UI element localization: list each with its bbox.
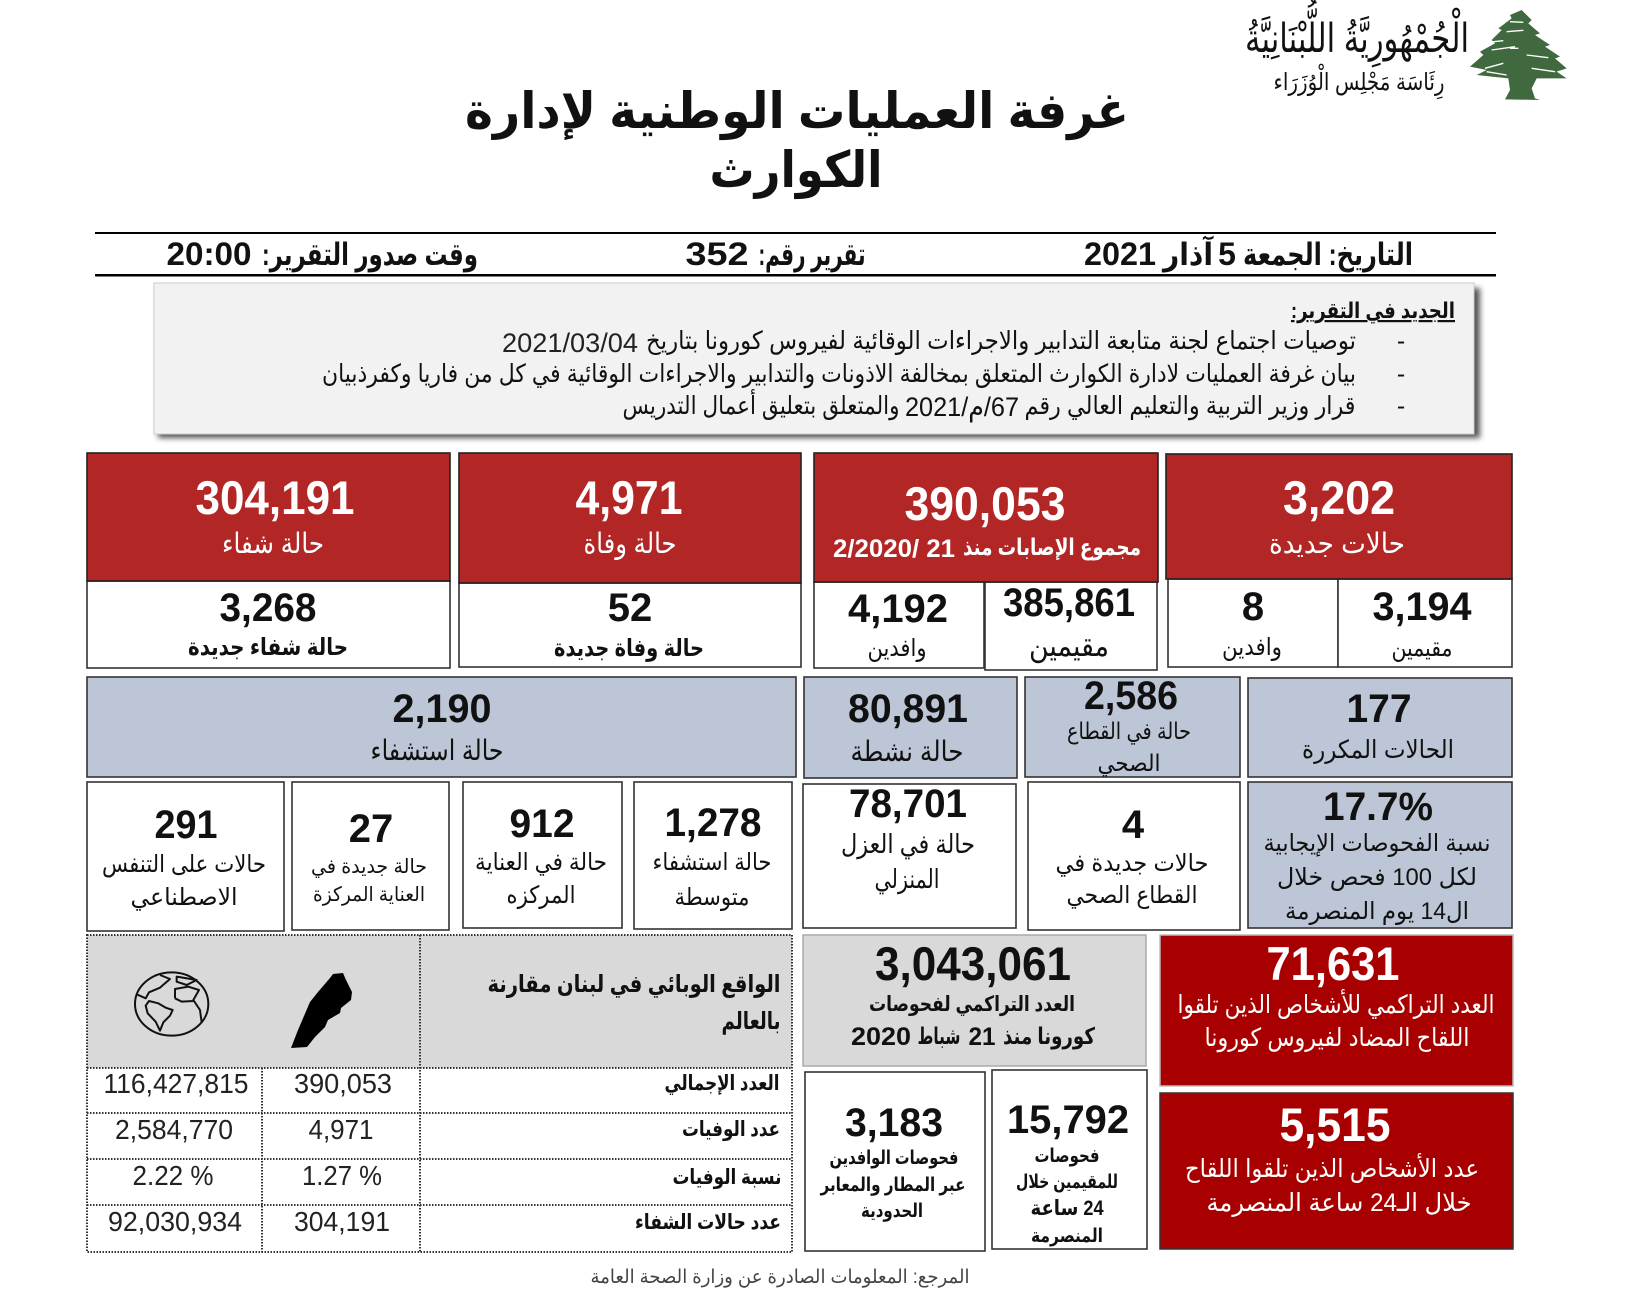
card: new health sector cases: القطاع الصحي [1066, 882, 1198, 909]
news items [322, 327, 1405, 422]
report date [1084, 235, 1413, 273]
panel: what's new in the report [154, 283, 1480, 438]
card: health sector cases: الصحي [1098, 750, 1160, 777]
report time: وقت صدور التقرير: [262, 237, 478, 273]
card: resident tests: للمقيمين خلال [1016, 1172, 1118, 1193]
card: total cases: 390,053 [904, 477, 1066, 530]
news items: بيان غرفة العمليات لادارة الكوارث المتعلق بمخالفة الاذونات والتدابير والاجراءات الوقائية في كل من فاريا وكفرذبيان [322, 360, 1356, 389]
card: total cases [814, 453, 1158, 670]
card: deaths: حالة وفاة [584, 528, 676, 560]
card: positivity rate: لكل 100 فحص خلال [1277, 864, 1477, 891]
row: death rate [132, 1160, 782, 1191]
card: home isolation: المنزلي [874, 864, 940, 895]
report info bar [95, 232, 1496, 276]
card: total cases: مقيمين [1029, 630, 1109, 663]
row: recoveries: 304,191 [294, 1206, 390, 1237]
card: vaccinated in 24 hours [1160, 1093, 1513, 1249]
card: resident tests: المنصرمة [1031, 1226, 1103, 1247]
card: new health sector cases: 4 [1122, 803, 1145, 847]
table heading: الواقع الوبائي في لبنان مقارنة [488, 971, 780, 998]
table heading: بالعالم [722, 1008, 780, 1035]
card: active cases [804, 677, 1017, 778]
card: deaths: 4,971 [576, 471, 682, 524]
card: resident tests: 15,792 [1007, 1098, 1129, 1142]
testing start date: 2020 [851, 1023, 911, 1051]
card: repeated cases: الحالات المكررة [1302, 736, 1454, 764]
card: ICU cases: المركزه [506, 882, 576, 909]
icon: globe [135, 972, 208, 1036]
testing start date: كورونا منذ [1003, 1023, 1095, 1050]
card: recoveries: حالة شفاء [222, 528, 324, 559]
card: arrival tests: فحوصات الوافدين [830, 1148, 958, 1169]
icon: cedar tree [1470, 10, 1567, 100]
report date: التاريخ: الجمعة [1243, 237, 1413, 273]
total cases label: 2/2020/ 21 [833, 535, 955, 563]
logo: Lebanese Republic calligraphy [1245, 0, 1469, 100]
source note: المرجع: المعلومات الصادرة عن وزارة الصحة العامة [590, 1267, 970, 1288]
total cases label [833, 534, 1141, 563]
card: ventilator cases [87, 782, 284, 931]
card: new cases [1166, 454, 1512, 667]
card: home isolation: 78,701 [849, 782, 967, 826]
news items: توصيات اجتماع لجنة متابعة التدابير والاجراءات الوقائية لفيروس كورونا بتاريخ [646, 327, 1356, 356]
report date: 2021 [1084, 236, 1156, 272]
card: cumulative tests: العدد التراكمي لفحوصات [869, 993, 1075, 1016]
row: death rate: 1.27 % [302, 1160, 382, 1191]
card: ICU cases [463, 782, 622, 928]
card: moderate hospital cases: متوسطة [674, 884, 750, 911]
card: new cases: مقيمين [1392, 635, 1452, 662]
card: active cases: حالة نشطة [850, 736, 964, 767]
row: recoveries [108, 1206, 781, 1237]
total cases label: مجموع الإصابات منذ [963, 534, 1141, 561]
card: home isolation: حالة في العزل [841, 829, 975, 860]
table heading [488, 971, 780, 1035]
card: total cases: 4,192 [848, 587, 948, 631]
card: hospitalised: حالة استشفاء [370, 735, 504, 766]
card: ICU cases: 912 [510, 802, 574, 846]
news items: - [1397, 327, 1405, 355]
icon: Lebanon map [291, 973, 352, 1048]
row: death rate: 2.22 % [132, 1160, 214, 1191]
card: new cases: 3,202 [1283, 471, 1395, 524]
card: health sector cases: حالة في القطاع [1067, 718, 1191, 745]
card: resident tests: 24 ساعة [1030, 1197, 1104, 1220]
card: active cases: 80,891 [848, 687, 968, 731]
row: deaths: 4,971 [308, 1114, 374, 1145]
card: arrival tests [805, 1072, 985, 1251]
card: cumulative vaccinated: اللقاح المضاد لفيروس كورونا [1204, 1024, 1470, 1053]
card: new cases: 8 [1242, 585, 1264, 629]
report time: 20:00 [166, 236, 252, 272]
row: total cases: العدد الإجمالي [664, 1072, 780, 1095]
testing start date: شباط [918, 1023, 960, 1049]
card: arrival tests: عبر المطار والمعابر [820, 1175, 966, 1196]
card: new ICU cases: حالة جديدة في [311, 856, 427, 879]
card: new ICU cases: العناية المركزة [313, 884, 425, 906]
card: total cases: 385,861 [1003, 581, 1135, 625]
card: ventilator cases: حالات على التنفس [102, 851, 266, 878]
title: الكوارث [710, 142, 882, 200]
report number [686, 236, 866, 273]
card: recoveries: حالة شفاء جديدة [188, 634, 348, 661]
report date: آذار [1161, 235, 1214, 273]
card: cumulative vaccinated [1160, 935, 1513, 1086]
card: positivity rate: نسبة الفحوصات الإيجابية [1264, 830, 1490, 857]
card: new cases: وافدين [1222, 634, 1282, 661]
news items: - [1397, 360, 1405, 388]
card: repeated cases [1248, 678, 1512, 777]
row: deaths: 2,584,770 [115, 1114, 233, 1145]
card: resident tests [992, 1070, 1147, 1249]
card: positivity rate: ال14 يوم المنصرمة [1285, 898, 1469, 925]
report number: تقرير رقم: [758, 237, 866, 273]
card: moderate hospital cases: حالة استشفاء [652, 849, 772, 876]
news items: - [1397, 392, 1405, 420]
card: resident tests: فحوصات [1034, 1146, 1100, 1167]
row: death rate: نسبة الوفيات [672, 1166, 782, 1189]
card: total cases: وافدين [868, 635, 926, 662]
card: positivity rate [1248, 782, 1512, 928]
card: cumulative tests [803, 935, 1146, 1066]
logo: Lebanese Republic calligraphy: الْجُمْهُورِيَّةُ اللُّبْنَانِيَّةُ [1245, 0, 1469, 68]
card: ICU cases: حالة في العناية [475, 849, 607, 876]
card: moderate hospital cases: 1,278 [664, 801, 762, 845]
card: home isolation [803, 782, 1016, 928]
card: deaths: حالة وفاة جديدة [554, 635, 704, 662]
card: new health sector cases: حالات جديدة في [1056, 850, 1208, 877]
card: recoveries: 304,191 [196, 471, 354, 524]
report number: 352 [686, 236, 748, 272]
card: recoveries: 3,268 [220, 586, 316, 630]
card: hospitalised: 2,190 [392, 687, 492, 731]
card: arrival tests: 3,183 [845, 1101, 943, 1145]
row: recoveries: عدد حالات الشفاء [635, 1211, 781, 1234]
title: غرفة العمليات الوطنية لإدارة [465, 83, 1129, 141]
testing start date [851, 1023, 1095, 1051]
table: Lebanon versus the world [87, 935, 792, 1252]
news items: والمتعلق بتعليق أعمال التدريس [622, 388, 900, 421]
card: arrival tests: الحدودية [861, 1201, 923, 1222]
card: health sector cases: 2,586 [1084, 674, 1178, 718]
card: vaccinated in 24 hours: خلال الـ24 ساعة المنصرمة [1206, 1189, 1472, 1217]
news items: 2021/03/04 [502, 328, 638, 358]
card: ventilator cases: 291 [154, 803, 218, 847]
news items: 67/م/2021 [905, 392, 1019, 422]
row: deaths [115, 1114, 780, 1145]
report time [166, 236, 478, 273]
row: total cases: 390,053 [294, 1068, 392, 1099]
row: recoveries: 92,030,934 [108, 1206, 242, 1237]
card: new ICU cases [292, 782, 449, 930]
card: vaccinated in 24 hours: عدد الأشخاص الذين تلقوا اللقاح [1185, 1152, 1479, 1183]
card: ventilator cases: الاصطناعي [130, 884, 238, 911]
news items: قرار وزير التربية والتعليم العالي رقم [1024, 392, 1356, 421]
card: cumulative tests: 3,043,061 [875, 937, 1071, 990]
card: new health sector cases [1028, 782, 1240, 930]
card: health sector cases [1025, 674, 1240, 777]
card: new cases: حالات جديدة [1269, 528, 1405, 559]
card: cumulative vaccinated: العدد التراكمي للأشخاص الذين تلقوا [1178, 988, 1494, 1019]
testing start date: 21 [968, 1023, 996, 1051]
card: new cases: 3,194 [1372, 585, 1472, 629]
card: deaths: 52 [608, 586, 652, 630]
report date: 5 [1218, 236, 1236, 272]
row: total cases [104, 1068, 780, 1099]
card: cumulative vaccinated: 71,631 [1266, 937, 1400, 990]
row: total cases: 116,427,815 [104, 1068, 248, 1099]
logo: Lebanese Republic calligraphy: رِئَاسَة مَجْلِس الْوُزَرَاء [1274, 63, 1444, 100]
panel heading: الجديد في التقرير: [1291, 298, 1455, 324]
title [465, 83, 1129, 200]
card: moderate hospital cases [634, 782, 792, 929]
card: hospitalised [87, 677, 796, 777]
card: positivity rate: 17.7% [1323, 785, 1433, 829]
card: new ICU cases: 27 [349, 807, 393, 851]
card: repeated cases: 177 [1346, 687, 1412, 731]
card: recoveries [87, 453, 450, 668]
card: deaths [459, 453, 801, 667]
row: deaths: عدد الوفيات [682, 1118, 780, 1141]
card: vaccinated in 24 hours: 5,515 [1280, 1098, 1390, 1151]
